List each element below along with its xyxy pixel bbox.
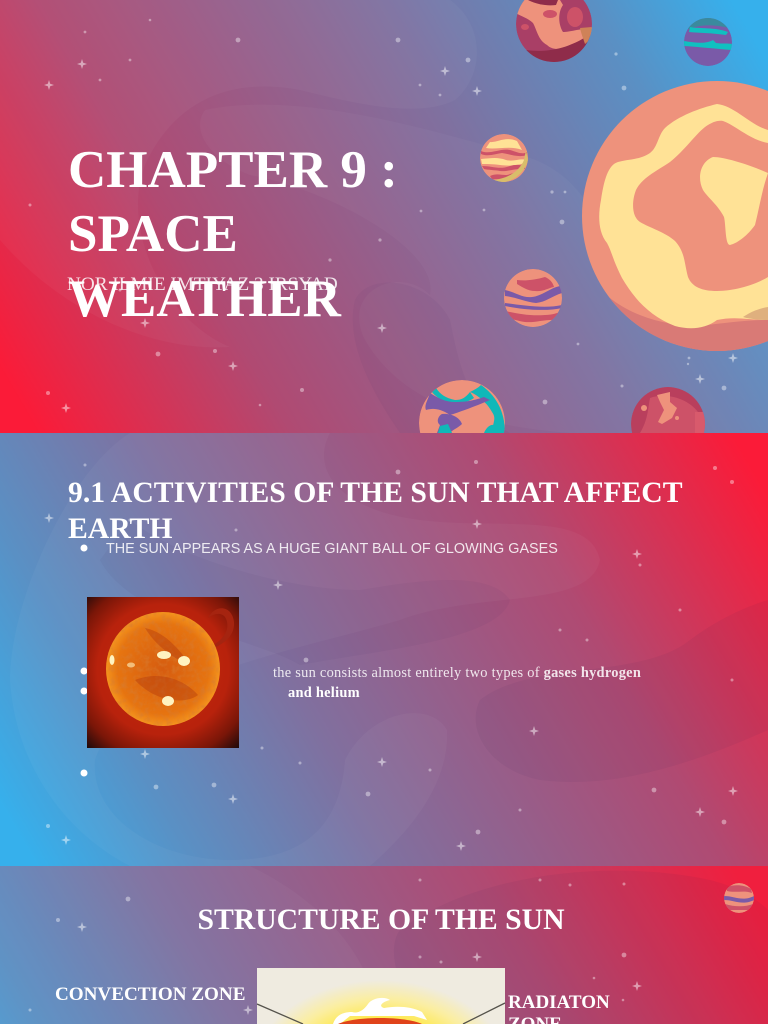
slide 2: activities of the sun [0, 433, 768, 866]
icon: small striped planet [480, 134, 528, 182]
section heading: 9.1 ACTIVITIES OF THE SUN THAT AFFECT [68, 477, 683, 509]
title: CHAPTER 9 : [68, 141, 398, 199]
body text: gases: the sun consists almost entirely two types of gases hydrogen [273, 665, 641, 681]
slide 3 background [0, 866, 768, 1024]
label: radiation zone: RADIATON [508, 992, 610, 1013]
nebula shapes [516, 871, 768, 1024]
photo: the sun [87, 597, 239, 748]
sparkles [44, 513, 738, 851]
nebula shapes [0, 0, 768, 433]
icon: teal planet, top right [684, 18, 732, 66]
body text: gases: and helium [288, 685, 360, 701]
bullet list markers [80, 544, 88, 776]
slide 3: structure of the sun [0, 866, 768, 1024]
subtitle: NOR ILMIE IMTIYAZ 3 IRSYAD [67, 274, 338, 295]
icon: mini banded planet [724, 883, 754, 913]
section heading [68, 482, 682, 538]
title: SPACE [68, 205, 238, 263]
slide 1: title slide [0, 0, 768, 466]
sparkles [44, 59, 738, 413]
icon: maroon planet, top [516, 0, 594, 62]
icon: multicolour planet, bottom [419, 380, 505, 433]
star field [28, 878, 626, 1012]
star field [46, 460, 734, 834]
label: convection zone: CONVECTION ZONE [55, 984, 245, 1005]
section heading: EARTH [68, 513, 173, 545]
diagram: sun structure [251, 968, 511, 1024]
slide 2 background [0, 433, 768, 866]
title [68, 152, 393, 317]
icon: large planet [582, 81, 768, 351]
icon: banded planet [504, 269, 562, 327]
slide heading: STRUCTURE OF THE SUN [197, 904, 565, 936]
bullet text: glowing gases: THE SUN APPEARS AS A HUGE GIANT BALL OF GLOWING GASES [106, 541, 558, 557]
title: WEATHER [68, 270, 342, 328]
body text: gases [273, 666, 641, 697]
star field [28, 19, 726, 406]
icon: red planet, bottom right [631, 387, 705, 433]
nebula shapes [634, 600, 768, 756]
label: radiation zone [508, 996, 610, 1024]
slide 1 background [0, 0, 768, 433]
sparkles [77, 922, 642, 1015]
